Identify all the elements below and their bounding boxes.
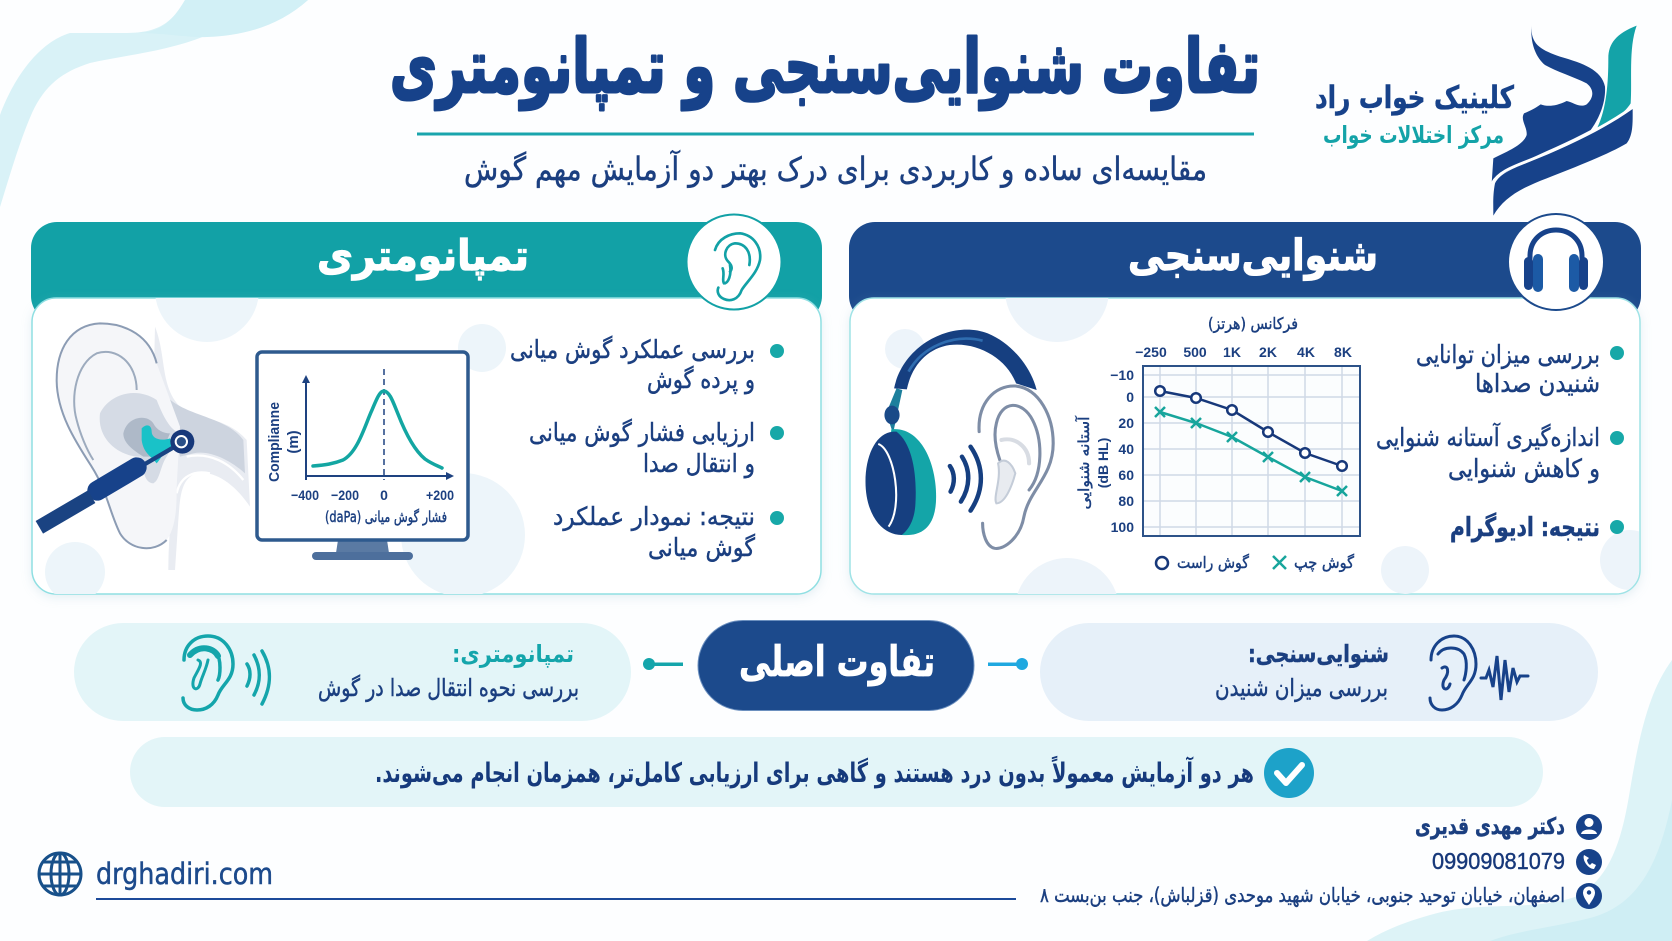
connector left: [643, 658, 683, 670]
frequency labels: 4K: [1297, 344, 1315, 360]
threshold labels: 80: [1118, 493, 1134, 509]
label: شنوایی‌سنجی:: [1248, 640, 1389, 668]
compliance axis title: [266, 402, 302, 482]
logo tagline: مرکز اختلالات خواب: [1323, 121, 1504, 149]
main difference pill: تفاوت اصلی: [739, 637, 935, 687]
bullet 2: اندازه‌گیری آستانه شنوایی: [1376, 422, 1600, 452]
monitor frame: [257, 352, 468, 540]
threshold labels: 100: [1111, 519, 1134, 535]
phone: 09909081079: [1432, 848, 1565, 874]
panel body: [850, 298, 1640, 594]
threshold labels: 60: [1118, 467, 1134, 483]
bullet list: [1376, 340, 1624, 543]
bullet 1: و پرده گوش: [647, 365, 755, 395]
panel: tympanometry: [31, 214, 822, 602]
frequency labels: 500: [1183, 344, 1207, 360]
icon: globe: [39, 853, 81, 895]
background wave: bottom right: [1367, 660, 1672, 941]
title underline: [417, 132, 1254, 136]
ear cup: [884, 429, 936, 535]
comparison: audiometry pill: [1040, 623, 1598, 721]
bullet 3: نتیجه: ادیوگرام: [1450, 512, 1600, 543]
probe: [39, 442, 183, 527]
y axis title: (dB HL): [1095, 438, 1111, 488]
threshold labels: 20: [1118, 415, 1134, 431]
concha: [100, 393, 180, 483]
bullet 1: بررسی عملکرد گوش میانی: [510, 335, 755, 364]
logo mark: [1492, 25, 1637, 216]
frequency labels: [1135, 344, 1352, 360]
frequency labels: 1K: [1223, 344, 1241, 360]
illustration: headphones and ear: [865, 330, 1053, 548]
chart: audiogram: [1075, 314, 1360, 573]
panel heading: تمپانومتری: [317, 231, 529, 281]
threshold labels: 0: [1126, 389, 1134, 405]
bullet 2: [1376, 422, 1624, 484]
chart legend: گوش چپ: [1294, 553, 1354, 573]
main difference pill: [698, 620, 974, 710]
bullet 1: بررسی میزان توانایی: [1416, 340, 1600, 369]
pressure labels: [291, 487, 454, 503]
skull and canal: [153, 327, 250, 570]
background wave: top left: [0, 0, 308, 207]
icon: ear with waveform: [1430, 636, 1528, 710]
contact block: [1040, 814, 1602, 909]
threshold labels: −10: [1110, 367, 1134, 383]
chart title: فرکانس (هرتز): [1208, 314, 1298, 334]
website: [39, 853, 1016, 900]
url: drghadiri.com: [96, 857, 273, 891]
bullet 1: [510, 335, 784, 395]
y axis title: [1075, 416, 1111, 510]
bullet 2: و انتقال صدا: [643, 449, 755, 479]
compliance axis title: (m): [285, 430, 302, 454]
ear tip: [142, 425, 173, 463]
axes: [302, 375, 454, 480]
icon: check: [1264, 748, 1314, 798]
threshold labels: [1110, 367, 1134, 535]
comparison: tympanometry pill: [74, 623, 631, 721]
outer ear: [57, 323, 180, 548]
icon: headphones: [1508, 214, 1604, 310]
subtitle: مقایسه‌ای ساده و کاربردی برای درک بهتر دو آزمایش مهم گوش: [464, 149, 1207, 188]
chart legend: [1156, 553, 1354, 573]
connector right: [988, 658, 1028, 670]
bullet 2: و کاهش شنوایی: [1448, 454, 1600, 484]
panel heading: شنوایی‌سنجی: [1128, 231, 1378, 281]
pressure axis title: فشار گوش میانی (daPa): [325, 508, 447, 526]
icon: ear: [686, 214, 782, 310]
bullet 3: نتیجه: نمودار عملکرد: [553, 502, 755, 531]
footer rule: [96, 898, 1016, 900]
clinic logo: [1315, 25, 1637, 216]
left ear series: [1155, 407, 1347, 496]
bullet 3: [553, 502, 784, 562]
panel header: [849, 222, 1641, 322]
note bar: [130, 737, 1543, 807]
headband stem: [886, 388, 902, 433]
note text: هر دو آزمایش معمولاً بدون درد هستند و گاهی برای ارزیابی کامل‌تر، همزمان انجام می‌شوند.: [375, 755, 1254, 789]
frequency labels: 2K: [1259, 344, 1277, 360]
threshold labels: 40: [1118, 441, 1134, 457]
panel body: [32, 298, 821, 594]
headband: [894, 330, 1037, 390]
bullet 2: [529, 418, 784, 479]
bullet list: [510, 335, 784, 562]
ear: [979, 386, 1053, 548]
illustration: ear with probe: [39, 323, 250, 570]
panel: audiometry: [848, 213, 1642, 600]
panel header: [31, 222, 822, 322]
doctor name: دکتر مهدی قدیری: [1415, 814, 1565, 840]
description: بررسی میزان شنیدن: [1215, 674, 1388, 702]
pressure labels: −400: [291, 487, 319, 503]
tympanogram curve: [313, 391, 442, 468]
chart legend: گوش راست: [1177, 553, 1249, 573]
logo name: کلینیک خواب راد: [1315, 80, 1515, 116]
sound waves: [950, 447, 981, 511]
monitor stand: [336, 540, 389, 553]
right ear series: [1155, 386, 1347, 471]
bullet 2: ارزیابی فشار گوش میانی: [529, 418, 755, 447]
frequency labels: −250: [1135, 344, 1167, 360]
title: تفاوت شنوایی‌سنجی و تمپانومتری: [390, 24, 1260, 111]
bullet 1: [1416, 340, 1624, 398]
pressure labels: 0: [380, 487, 388, 503]
frequency labels: 8K: [1334, 344, 1352, 360]
bullet 3: گوش میانی: [648, 533, 755, 562]
y axis title: آستانه شنوایی: [1075, 416, 1093, 510]
label: تمپانومتری:: [452, 640, 574, 668]
bullet 1: شنیدن صداها: [1475, 369, 1600, 398]
icon: ear with waves: [183, 636, 270, 710]
pressure labels: −200: [331, 487, 359, 503]
pressure labels: +200: [426, 487, 454, 503]
chart: tympanogram on monitor: [257, 352, 468, 560]
compliance axis title: Complianne: [266, 402, 283, 482]
address: اصفهان، خیابان توحید جنوبی، خیابان شهید موحدی (قزلباش)، جنب بن‌بست ۸: [1040, 883, 1565, 907]
description: بررسی نحوه انتقال صدا در گوش: [318, 674, 579, 702]
